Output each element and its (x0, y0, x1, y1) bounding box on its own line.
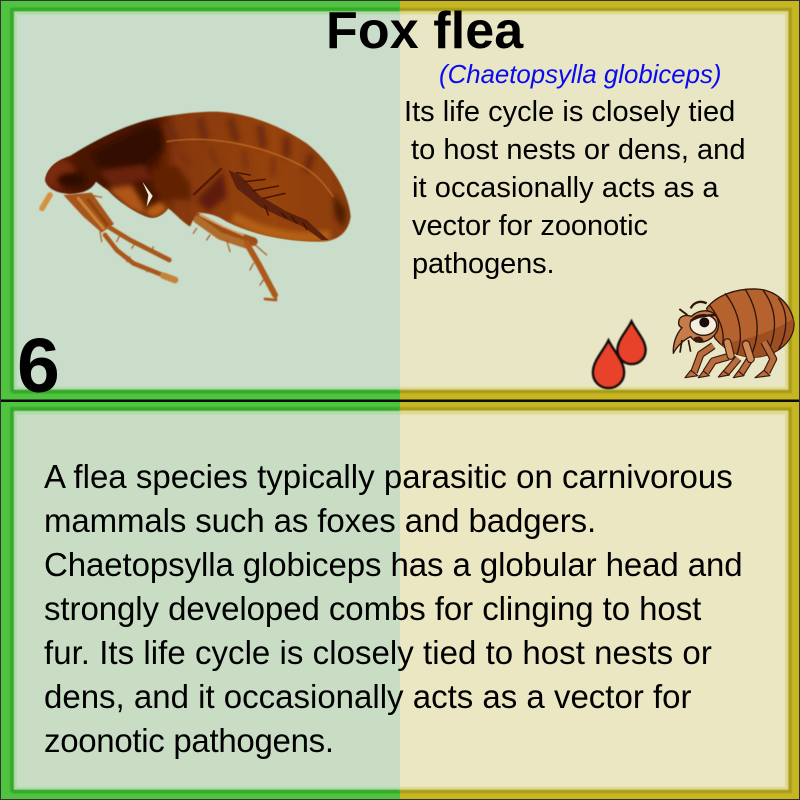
text block: short description: to host nests or dens, and (411, 134, 746, 166)
panel: top right fill (400, 9, 790, 391)
eye (690, 315, 717, 335)
far legs (726, 358, 750, 374)
mouthpart (42, 195, 50, 208)
head (673, 311, 719, 353)
text block: full description: mammals such as foxes and badgers. (44, 502, 596, 539)
text block: full description: dens, and it occasionally acts as a vector for (44, 678, 692, 715)
abdomen bottom glow (233, 217, 330, 237)
text block: short description (404, 96, 746, 280)
mandibles (680, 340, 691, 353)
panel: bottom right fill (400, 408, 790, 791)
text block: full description (44, 458, 743, 759)
dorsal segment shading (167, 118, 312, 172)
icon: cartoon flea (673, 289, 794, 378)
scientific name: (Chaetopsylla globiceps) (439, 61, 721, 89)
icon: blood drops (593, 322, 646, 388)
panel: top left fill (12, 9, 400, 391)
femur with spines (228, 170, 328, 240)
text block: full description: strongly developed combs for clinging to host (44, 590, 701, 627)
illustration: fox flea photograph (42, 112, 351, 300)
hind legs (170, 202, 253, 242)
card number: 6 (17, 323, 60, 409)
text block: full description: zoonotic pathogens. (44, 722, 334, 759)
text block: full description: fur. Its life cycle is closely tied to host nests or (44, 634, 712, 671)
thorax lower plates (107, 185, 145, 216)
text block: full description: Chaetopsylla globiceps has a globular head and (44, 546, 743, 583)
near legs (694, 342, 773, 372)
white gap (142, 182, 153, 207)
body (45, 112, 351, 242)
panel: bottom left fill (12, 408, 400, 791)
body (707, 289, 794, 357)
text block: short description: vector for zoonotic (412, 210, 648, 242)
head (45, 160, 75, 187)
title: Fox flea (326, 2, 523, 60)
text block: short description: pathogens. (412, 248, 555, 280)
leg bristles (90, 195, 267, 285)
text block: short description: it occasionally acts as a (412, 172, 719, 204)
text block: short description: Its life cycle is closely tied (404, 96, 735, 128)
front legs (63, 193, 114, 233)
text block: full description: A flea species typically parasitic on carnivorous (44, 458, 733, 495)
